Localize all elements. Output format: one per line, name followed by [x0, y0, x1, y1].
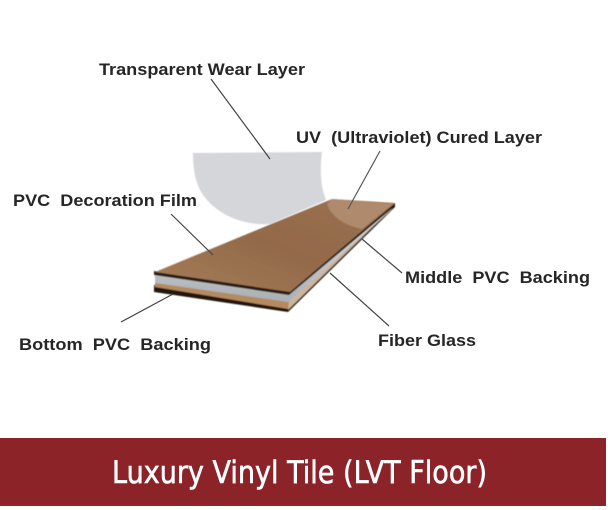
leader line: bottom PVC backing [121, 294, 173, 322]
bottom PVC backing layer [154, 204, 395, 312]
label: transparent wear layer: Transparent Wear Layer [99, 60, 305, 79]
leader line: middle PVC backing [362, 239, 402, 273]
side tan strip [288, 206, 394, 310]
decoration film edge [154, 203, 395, 295]
leader line: UV cured layer [348, 151, 380, 209]
leader line: PVC decoration film [171, 214, 213, 255]
decoration film wood surface [155, 199, 395, 292]
label: bottom PVC backing: Bottom PVC Backing [19, 335, 211, 354]
label: fiber glass: Fiber Glass [378, 331, 476, 350]
fiber glass tan layer [155, 282, 290, 309]
title banner [0, 438, 606, 506]
leader line: fiber glass [330, 273, 389, 326]
UV cured layer highlight [327, 199, 393, 229]
label: UV cured layer: UV (Ultraviolet) Cured Layer [296, 128, 542, 147]
transparent wear layer sheet [193, 152, 326, 224]
illustration: layered vinyl plank [154, 152, 395, 312]
title: Luxury Vinyl Tile (LVT Floor) [112, 455, 487, 491]
label: middle PVC backing: Middle PVC Backing [405, 268, 590, 287]
leader line: transparent wear layer [211, 79, 270, 159]
label: PVC decoration film: PVC Decoration Film [13, 191, 197, 210]
middle PVC backing layer [155, 207, 391, 302]
